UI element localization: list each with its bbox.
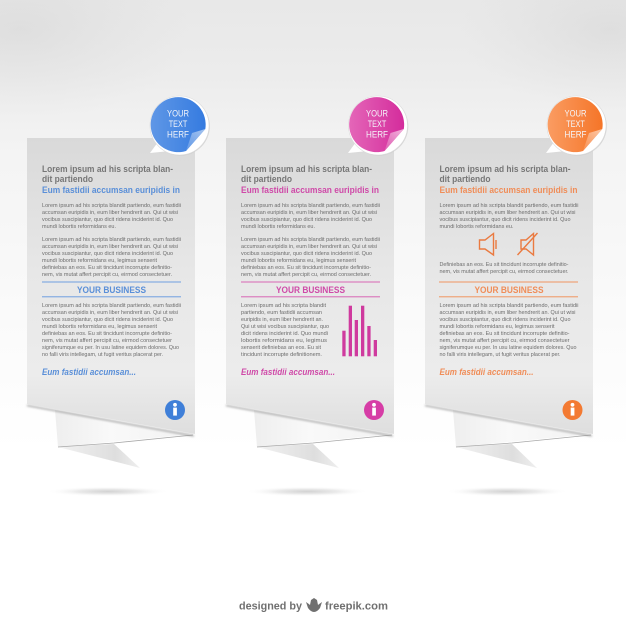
icon: muted speaker	[518, 233, 538, 255]
paragraph 2: mundi lobortis reformidans eu, legimus senserit	[42, 258, 158, 264]
heading	[440, 164, 578, 195]
paragraph 3: nem, vis mutat affert percipit cu, eirmod consectetuer	[440, 338, 570, 344]
paragraph 2: Definiebas an eos. Eu sit tincidunt incorrupte definitio-	[440, 262, 569, 268]
paragraph 3: euripidis in, eum liber hendrerit an.	[241, 317, 323, 323]
speech bubble: TEXT	[368, 119, 386, 130]
paragraph 3: definiebas an eos. Eu sit tincidunt incorrupte definitio-	[42, 331, 172, 337]
paragraph 3: signiferumque eu per. In usu latine equidem dolores. Quo	[440, 345, 577, 351]
heading: dit partiendo	[440, 174, 491, 184]
paragraph 1: accumsan euripidis in, eum liber hendrerit an. Qui ut wisi	[241, 210, 377, 216]
speech bubble: YOUR	[564, 109, 587, 120]
paragraph 1	[241, 203, 380, 230]
paragraph 3: lobortis reformidans eu, legimus	[241, 338, 327, 344]
floor shadow	[445, 486, 569, 496]
paragraph 1: Lorem ipsum ad his scripta blandit partiendo, eum fastidii	[241, 203, 380, 209]
paragraph 2: definiebas an eos. Eu sit tincidunt incorrupte definitio-	[42, 265, 172, 271]
card body	[27, 138, 195, 436]
paragraph 3: Lorem ipsum ad his scripta blandit	[241, 303, 327, 309]
paragraph 3	[42, 303, 181, 358]
paragraph 3	[241, 303, 329, 358]
icon: info	[562, 400, 582, 420]
section heading: your business: YOUR BUSINESS	[77, 285, 146, 295]
paragraph 3: partiendo, eum fastidii accumsan	[241, 310, 322, 316]
heading: Eum fastidii accumsan euripidis in	[241, 185, 379, 195]
heading: Lorem ipsum ad his scripta blan-	[42, 164, 173, 174]
icon: speaker	[480, 234, 496, 255]
speech bubble	[348, 96, 408, 156]
heading: dit partiendo	[241, 174, 292, 184]
paragraph 3: signiferumque eu per. In usu latine equidem dolores. Quo	[42, 345, 179, 351]
panel: orange card	[425, 96, 607, 496]
paragraph 1: vocibus suscipiantur, quo dicit ridens inciderint id. Quo	[440, 217, 571, 223]
paragraph 2: accumsan euripidis in, eum liber hendrerit an. Qui ut wisi	[241, 244, 377, 250]
ribbon fold	[254, 410, 393, 468]
card body	[425, 138, 593, 436]
paragraph 3: tincidunt incorrupte definitionem.	[241, 352, 322, 358]
paragraph 3: no falli viris intellegam, ut fugit veritus placerat per.	[42, 352, 163, 358]
paragraph 2: definiebas an eos. Eu sit tincidunt incorrupte definitio-	[241, 265, 371, 271]
paragraph 3: dicit ridens inciderint id. Quo mundi	[241, 331, 328, 337]
paragraph 2: nem, vis mutat affert percipit cu, eirmod consectetuer.	[241, 272, 371, 278]
paragraph 1	[440, 203, 578, 230]
speech bubble: TEXT	[566, 119, 585, 130]
ribbon fold	[55, 410, 194, 468]
paragraph 3: Lorem ipsum ad his scripta blandit partiendo, eum fastidii	[42, 303, 181, 309]
icon: info	[165, 400, 185, 420]
paragraph 3: mundi lobortis reformidans eu, legimus senserit	[42, 324, 158, 330]
paragraph 1	[42, 203, 181, 230]
paragraph 1: vocibus suscipiantur, quo dicit ridens inciderint id. Quo	[241, 217, 372, 223]
speech bubble	[150, 96, 210, 156]
heading: Lorem ipsum ad his scripta blan-	[241, 164, 372, 174]
heading: Eum fastidii accumsan euripidis in	[42, 185, 180, 195]
paragraph 2	[241, 237, 380, 278]
bar chart	[342, 306, 377, 356]
paragraph 3: accumsan euripidis in, eum liber hendrerit an. Qui ut wisi	[440, 310, 576, 316]
paragraph 1: mundi lobortis reformidans eu.	[241, 224, 315, 230]
paragraph 3: senserit definiebas an eos. Eu sit	[241, 345, 322, 351]
section heading: your business	[439, 282, 578, 297]
panel: blue card	[27, 96, 210, 496]
ribbon fold	[453, 410, 592, 468]
paragraph 2: vocibus suscipiantur, quo dicit ridens inciderint id. Quo	[42, 251, 173, 257]
icon: info	[364, 400, 384, 420]
heading: dit partiendo	[42, 174, 93, 184]
paragraph 1: mundi lobortis reformidans eu.	[440, 224, 514, 230]
floor shadow	[46, 486, 170, 496]
section heading: your business	[241, 282, 380, 297]
section heading: your business	[42, 282, 181, 297]
floor shadow	[245, 486, 369, 496]
section heading: your business: YOUR BUSINESS	[276, 285, 345, 295]
speech bubble	[546, 96, 607, 156]
italic link text: Eum fastidii accumsan...	[42, 367, 136, 377]
paragraph 1: accumsan euripidis in, eum liber hendrerit an. Qui ut wisi	[440, 210, 576, 216]
italic link text: Eum fastidii accumsan...	[241, 367, 335, 377]
italic link text: Eum fastidii accumsan...	[440, 367, 534, 377]
paragraph 3: accumsan euripidis in, eum liber hendrerit an. Qui ut wisi	[42, 310, 178, 316]
paragraph 2: mundi lobortis reformidans eu, legimus senserit	[241, 258, 357, 264]
paragraph 1: Lorem ipsum ad his scripta blandit partiendo, eum fastidii	[42, 203, 181, 209]
heading	[241, 164, 379, 195]
paragraph 3: Qui ut wisi vocibus suscipiantur, quo	[241, 324, 329, 330]
heading: Lorem ipsum ad his scripta blan-	[440, 164, 570, 174]
paragraph 2: nem, vis mutat affert percipit cu, eirmod consectetuer.	[440, 269, 568, 275]
paragraph 1: Lorem ipsum ad his scripta blandit partiendo, eum fastidii	[440, 203, 578, 209]
footer credit: designed by	[239, 600, 303, 612]
paragraph 3: no falli viris intellegam, ut fugit veritus placerat per.	[440, 352, 560, 358]
speech bubble: HERF	[366, 130, 388, 141]
footer credit: freepik.com	[325, 600, 388, 612]
paragraph 3: mundi lobortis reformidans eu, legimus senserit	[440, 324, 555, 330]
paragraph 3: definiebas an eos. Eu sit tincidunt incorrupte definitio-	[440, 331, 570, 337]
paragraph 3: vocibus suscipiantur, quo dicit ridens inciderint id. Quo	[440, 317, 571, 323]
section heading: your business: YOUR BUSINESS	[474, 285, 544, 295]
footer credit	[239, 598, 388, 612]
speech bubble: HERF	[564, 130, 587, 141]
heading	[42, 164, 180, 195]
paragraph 3	[440, 303, 578, 358]
paragraph 2	[440, 262, 569, 275]
paragraph 2: vocibus suscipiantur, quo dicit ridens inciderint id. Quo	[241, 251, 372, 257]
paragraph 2	[42, 237, 181, 278]
speech bubble: YOUR	[167, 109, 189, 120]
paragraph 3: Lorem ipsum ad his scripta blandit partiendo, eum fastidii	[440, 303, 578, 309]
paragraph 1: vocibus suscipiantur, quo dicit ridens inciderint id. Quo	[42, 217, 173, 223]
paragraph 3: nem, vis mutat affert percipit cu, eirmod consectetuer	[42, 338, 172, 344]
paragraph 2: nem, vis mutat affert percipit cu, eirmod consectetuer.	[42, 272, 172, 278]
speech bubble: YOUR	[366, 109, 388, 120]
heading: Eum fastidii accumsan euripidis in	[440, 185, 578, 195]
icon: crown logo	[306, 598, 322, 612]
paragraph 2: Lorem ipsum ad his scripta blandit partiendo, eum fastidii	[42, 237, 181, 243]
paragraph 1: accumsan euripidis in, eum liber hendrerit an. Qui ut wisi	[42, 210, 178, 216]
speech bubble: HERF	[167, 130, 189, 141]
card body	[226, 138, 394, 436]
paragraph 2: Lorem ipsum ad his scripta blandit partiendo, eum fastidii	[241, 237, 380, 243]
speech bubble: TEXT	[169, 119, 187, 130]
paragraph 1: mundi lobortis reformidans eu.	[42, 224, 116, 230]
paragraph 2: accumsan euripidis in, eum liber hendrerit an. Qui ut wisi	[42, 244, 178, 250]
panel: magenta card	[226, 96, 408, 496]
paragraph 3: vocibus suscipiantur, quo dicit ridens inciderint id. Quo	[42, 317, 173, 323]
